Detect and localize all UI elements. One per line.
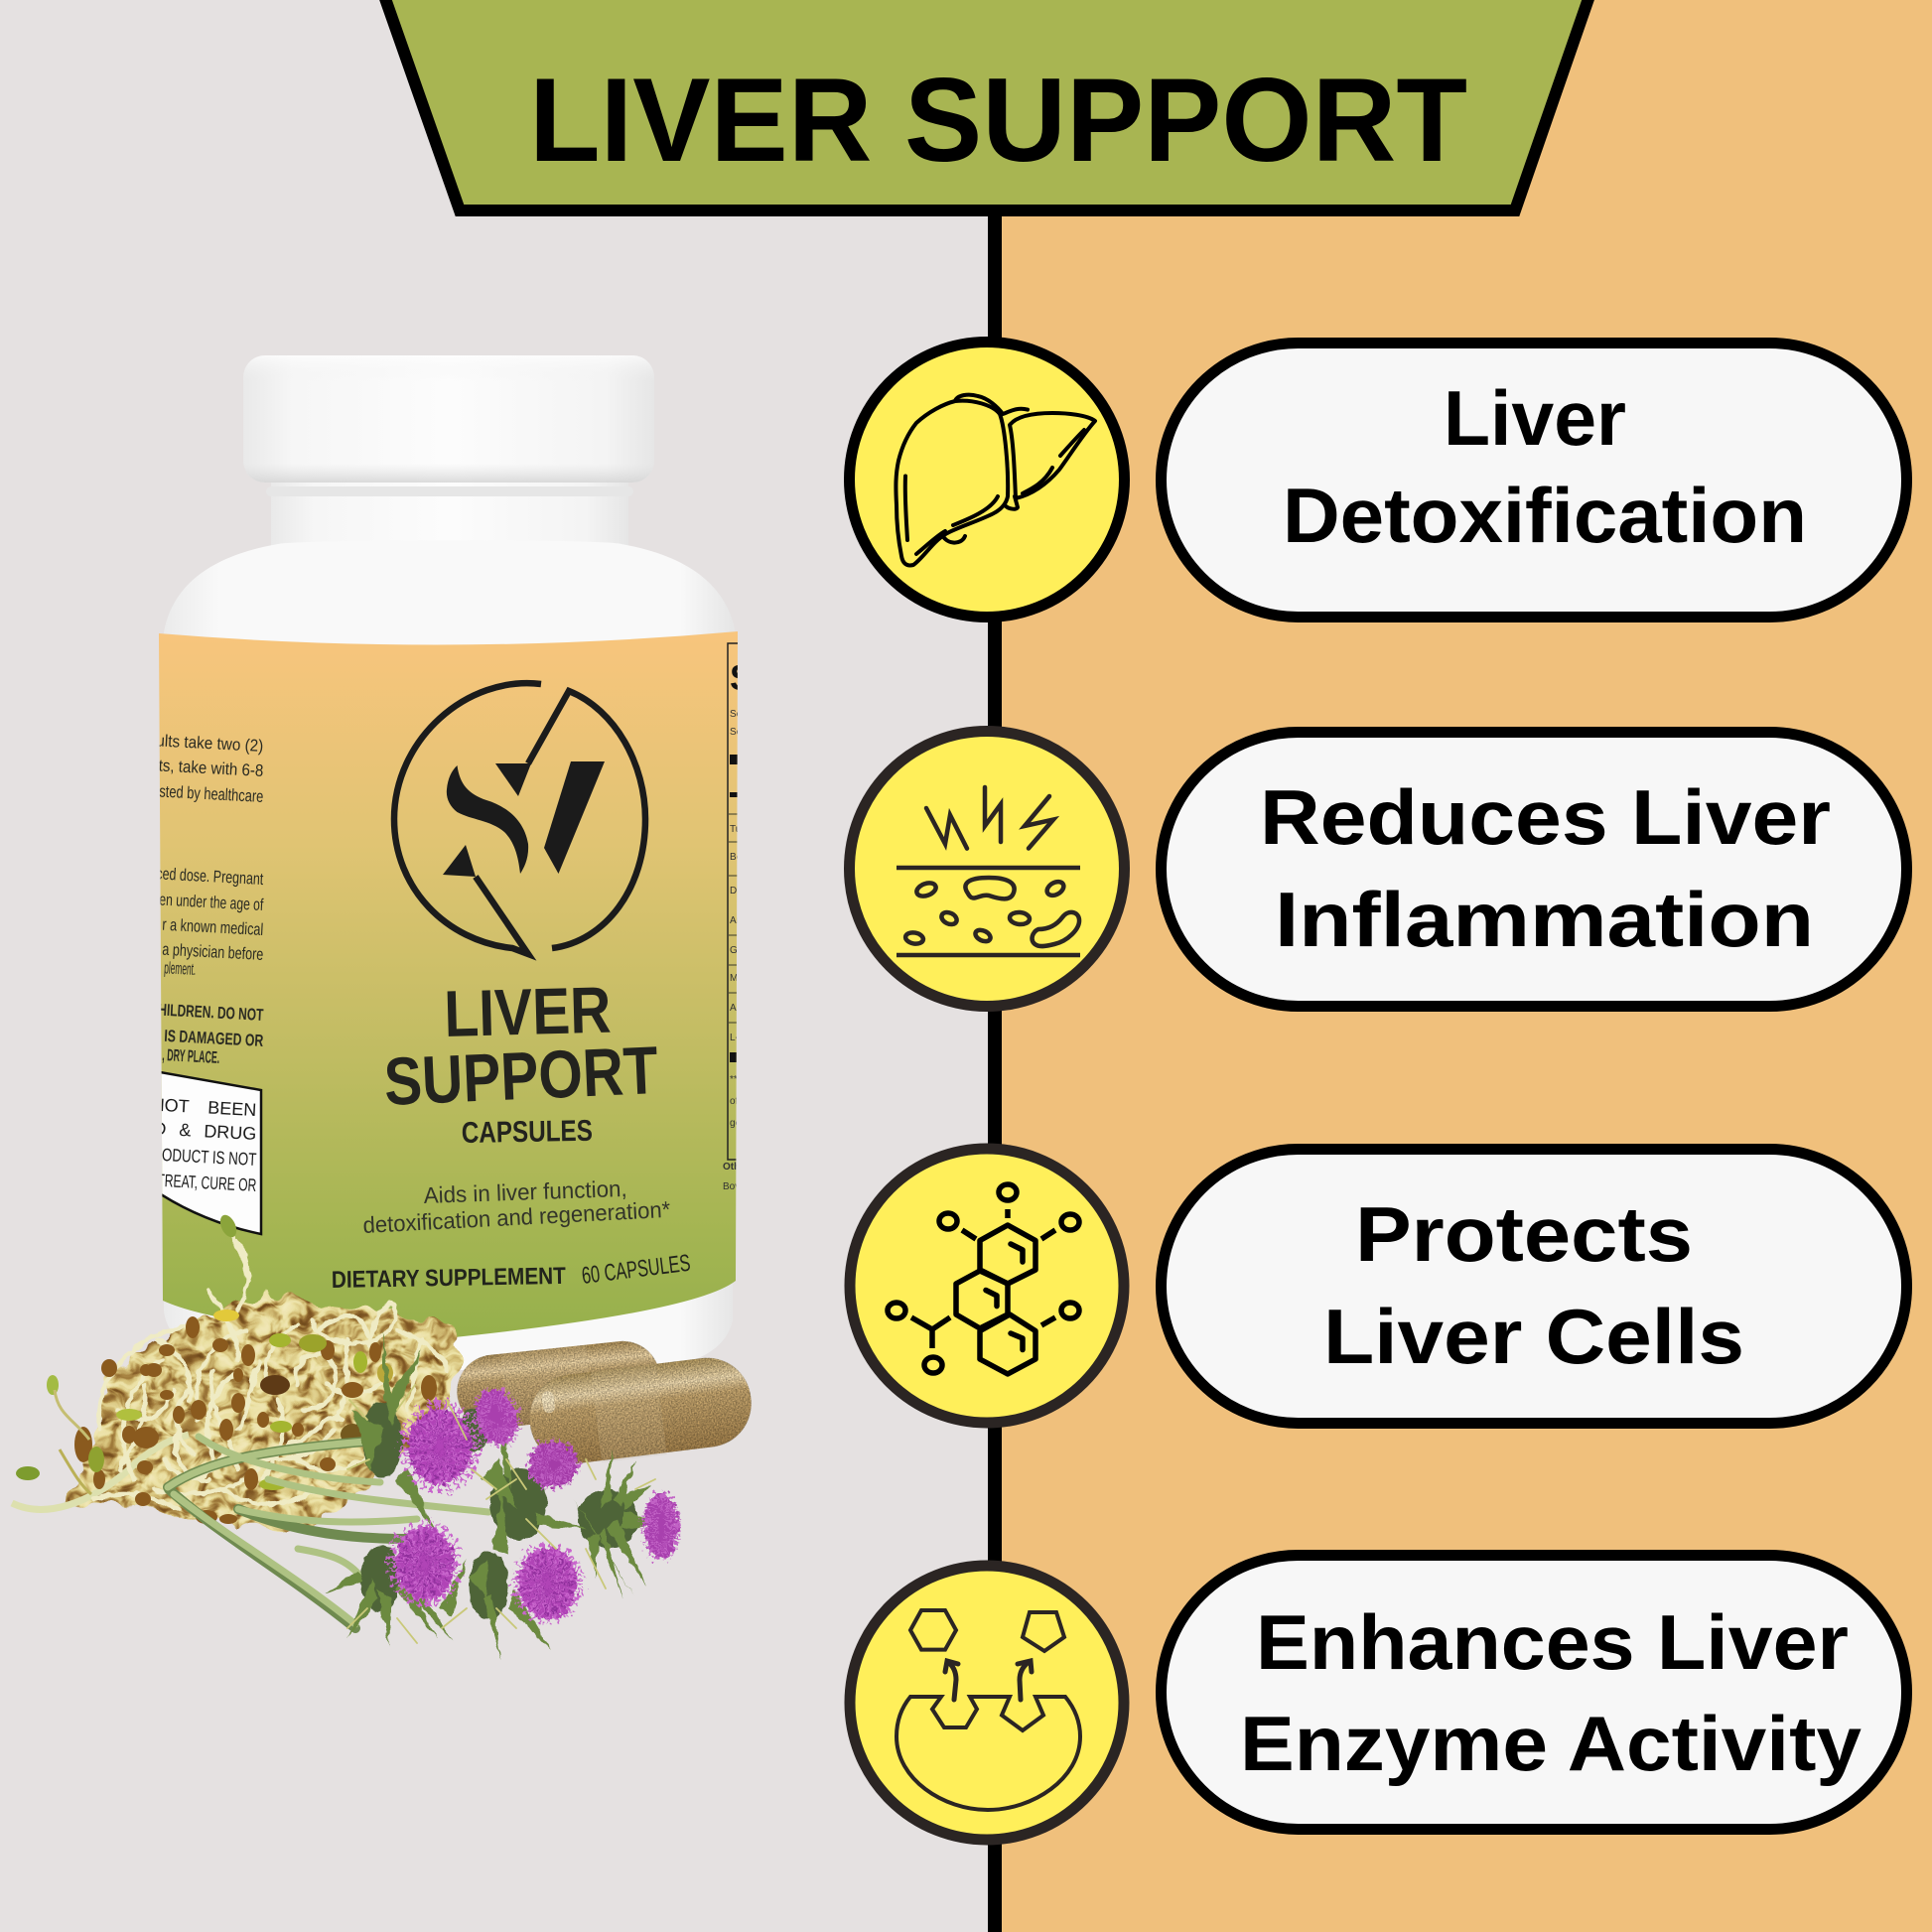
product name: CAPSULES — [462, 1115, 593, 1150]
supplement facts edge: Bovin — [723, 1181, 748, 1192]
disclaimer box: AS NOT BEEN — [108, 1092, 257, 1120]
directions fine print: sted by healthcare — [159, 782, 264, 806]
capsules — [454, 1337, 757, 1470]
supplement facts edge: Serv — [730, 709, 751, 720]
directions fine print: , DRY PLACE. — [162, 1045, 220, 1067]
directions fine print: plement. — [164, 958, 197, 979]
directions fine print: sults, take with 6-8 — [139, 755, 264, 780]
directions fine print: IS DAMAGED OR — [164, 1027, 264, 1050]
benefit label: Reduces Liver — [1260, 773, 1831, 861]
dietary supplement line: DIETARY SUPPLEMENT — [332, 1263, 566, 1294]
benefit label: Protects — [1355, 1190, 1693, 1278]
flower head 2 — [470, 1385, 523, 1449]
flower head 1 — [408, 1409, 472, 1484]
supplement facts edge: Arti — [730, 915, 745, 926]
benefit label: Inflammation — [1275, 876, 1814, 963]
flower head 4 — [644, 1492, 678, 1560]
icon: molecule — [888, 1184, 1079, 1374]
benefit label: Liver — [1444, 374, 1626, 462]
benefit label — [1240, 1598, 1862, 1787]
title banner — [382, 0, 1591, 210]
brand logo — [394, 683, 645, 954]
supplement facts edge: Other — [723, 1162, 750, 1173]
product tagline: detoxification and regeneration* — [362, 1196, 671, 1238]
disclaimer box: OOD & DRUG — [125, 1117, 257, 1144]
supplement facts edge — [723, 642, 738, 1189]
product name: LIVER — [443, 973, 612, 1050]
bottle label — [159, 631, 738, 1337]
supplement facts edge: Serv — [730, 727, 751, 738]
supplement facts edge: of — [730, 1096, 739, 1107]
product name — [382, 973, 659, 1150]
benefit pill: reduces liver inflammation — [1162, 733, 1906, 1007]
benefit 2 icon circle: inflammation — [850, 731, 1124, 1007]
thistle bracts — [326, 1330, 663, 1660]
directions fine print: r a known medical — [162, 915, 264, 939]
benefit pill: enhances liver enzyme activity — [1162, 1555, 1906, 1829]
dietary supplement line — [332, 1250, 692, 1294]
supplement facts edge: L-Se — [730, 1033, 752, 1043]
title: LIVER SUPPORT — [529, 54, 1467, 187]
directions fine print — [159, 735, 264, 1063]
icon: inflammation — [897, 787, 1080, 955]
benefit pill: liver detoxification — [1162, 344, 1906, 618]
flower head 6 — [519, 1548, 577, 1619]
flower head 3 — [529, 1442, 577, 1487]
supplement facts edge: gen — [730, 1118, 747, 1129]
flower head 5 — [395, 1527, 455, 1600]
supplement facts edge: Tum — [730, 824, 750, 835]
benefit label: Detoxification — [1283, 472, 1807, 559]
product tagline: Aids in liver function, — [423, 1175, 627, 1208]
supplement facts edge: Milk — [730, 973, 749, 984]
bottle cap — [243, 355, 654, 566]
benefit 4 icon circle: enzyme — [850, 1566, 1124, 1840]
thistle spines — [347, 1385, 655, 1643]
supplement facts edge: **Th — [730, 1074, 749, 1085]
benefit label: Liver Cells — [1323, 1293, 1744, 1380]
front capsule — [524, 1351, 757, 1470]
directions fine print: adults take two (2) — [139, 730, 264, 756]
supplement facts edge: Gin — [730, 945, 746, 956]
alfalfa sprouts — [12, 1212, 459, 1526]
thistle flower heads — [395, 1385, 678, 1619]
directions fine print: ced dose. Pregnant — [156, 864, 264, 889]
supplement facts edge: Alfa — [730, 1003, 748, 1014]
benefit label: Enhances Liver — [1256, 1598, 1849, 1686]
milk thistle and alfalfa sprouts — [12, 1212, 678, 1660]
supplement facts edge: S — [730, 657, 754, 698]
dietary supplement line: 60 CAPSULES — [580, 1250, 692, 1290]
benefit 3 icon circle: protective molecule — [850, 1149, 1124, 1423]
directions fine print: a physician before — [162, 940, 264, 964]
icon: liver — [896, 395, 1095, 565]
disclaimer box — [161, 1071, 262, 1235]
benefit label — [1283, 374, 1807, 559]
icon: enzyme — [897, 1610, 1080, 1810]
disclaimer box: TREAT, CURE OR — [157, 1171, 257, 1195]
directions fine print: HILDREN. DO NOT — [158, 1000, 264, 1025]
benefit label — [1260, 773, 1831, 963]
disclaimer box: RODUCT IS NOT — [152, 1145, 257, 1170]
supplement facts edge: Beef — [730, 852, 751, 863]
directions fine print: en under the age of — [159, 891, 264, 914]
thistle stems — [168, 1437, 488, 1628]
supplement facts edge: Danl — [730, 886, 751, 897]
supplement bottle — [159, 355, 738, 1370]
benefit pill: protects liver cells — [1162, 1150, 1906, 1424]
benefit label — [1323, 1190, 1744, 1380]
benefit label: Enzyme Activity — [1240, 1700, 1862, 1787]
bottle body — [162, 540, 738, 1370]
product name: SUPPORT — [382, 1033, 659, 1120]
product tagline — [362, 1175, 671, 1238]
rear capsule — [454, 1337, 663, 1432]
benefit 1 icon circle: liver — [850, 342, 1124, 618]
